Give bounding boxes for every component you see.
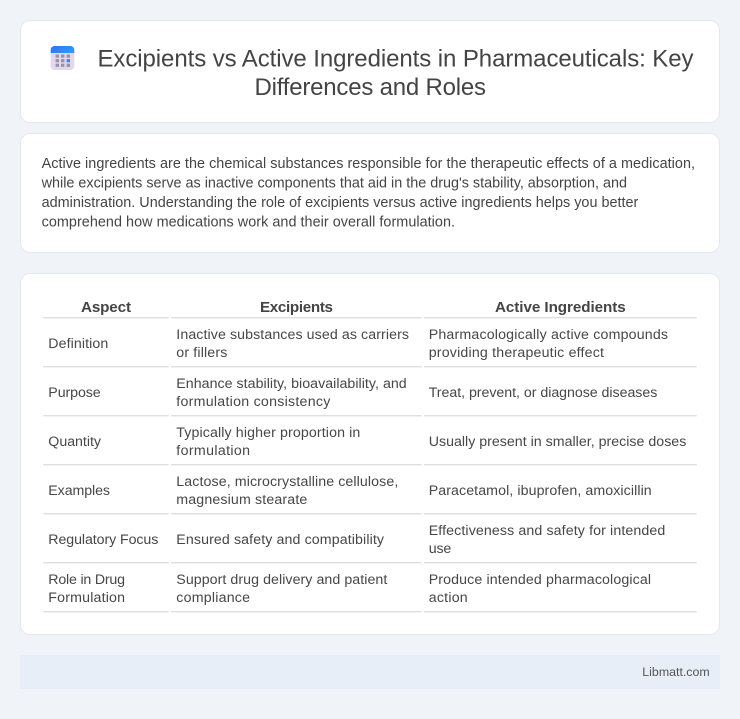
row: Examples: Paracetamol, ibuprofen, amoxicillin (429, 483, 652, 499)
row: Quantity: formulation (176, 443, 250, 459)
panel: introduction card (20, 133, 720, 253)
row: Definition: providing therapeutic effect (429, 345, 604, 361)
row: Examples: Lactose, microcrystalline cellulose, (176, 474, 398, 490)
row: Role in Drug Formulation: Formulation (48, 590, 125, 606)
panel: title card (20, 20, 720, 123)
title: Excipients vs Active Ingredients in Pharmaceuticals: Key (98, 46, 694, 73)
row: Definition: Inactive substances used as carriers (176, 327, 409, 343)
row: Examples (48, 474, 652, 508)
row: Role in Drug Formulation: Produce intended pharmacological (429, 572, 651, 588)
row: Examples: Examples (48, 483, 110, 499)
row: Purpose (48, 376, 657, 410)
row: Role in Drug Formulation (48, 572, 651, 606)
row: Role in Drug Formulation: action (429, 590, 468, 606)
row: Purpose: Purpose (48, 385, 101, 401)
text block: introduction: comprehend how medications work and their overall formulation. (42, 214, 455, 230)
text block: introduction: while excipients serve as inactive components that aid in the drug's stability, absorption, and (41, 176, 627, 192)
title (98, 46, 694, 101)
row: Purpose: Enhance stability, bioavailability, and (176, 376, 407, 392)
row: Purpose: Treat, prevent, or diagnose diseases (429, 385, 657, 401)
text block: introduction: Active ingredients are the chemical substances responsible for the therapeutic effects of a medication, (42, 156, 695, 172)
row: Role in Drug Formulation: Support drug delivery and patient (176, 572, 387, 588)
icon: calendar (51, 46, 74, 70)
table header row: Active Ingredients (495, 299, 626, 316)
title: Differences and Roles (254, 74, 486, 101)
text block: introduction (41, 156, 695, 230)
table header row: Aspect (81, 299, 131, 316)
table header row (81, 299, 626, 316)
text block: introduction: administration. Understanding the role of excipients versus active ingredients helps you better (42, 195, 639, 211)
table header row: Excipients (260, 299, 333, 316)
panel: comparison table card (20, 273, 720, 635)
row: Quantity: Usually present in smaller, precise doses (429, 434, 686, 450)
row: Examples: magnesium stearate (176, 492, 307, 508)
row: Quantity: Typically higher proportion in (176, 425, 360, 441)
row: Regulatory Focus (48, 523, 665, 557)
row: Regulatory Focus: Ensured safety and compatibility (176, 532, 385, 548)
row: Quantity: Quantity (48, 434, 102, 450)
row: Definition (48, 327, 668, 361)
footer bar (20, 655, 720, 689)
row: Role in Drug Formulation: Role in Drug (48, 572, 125, 588)
row: Role in Drug Formulation: compliance (176, 590, 250, 606)
row: Definition: Definition (48, 336, 108, 352)
row: Purpose: formulation consistency (176, 394, 331, 410)
row: Regulatory Focus: use (429, 541, 451, 557)
footer text: Libmatt.com (642, 665, 710, 679)
row: Definition: or fillers (176, 345, 227, 361)
row: Quantity (48, 425, 686, 459)
row: Regulatory Focus: Effectiveness and safety for intended (429, 523, 665, 539)
row: Definition: Pharmacologically active compounds (429, 327, 668, 343)
row: Regulatory Focus: Regulatory Focus (48, 532, 158, 548)
